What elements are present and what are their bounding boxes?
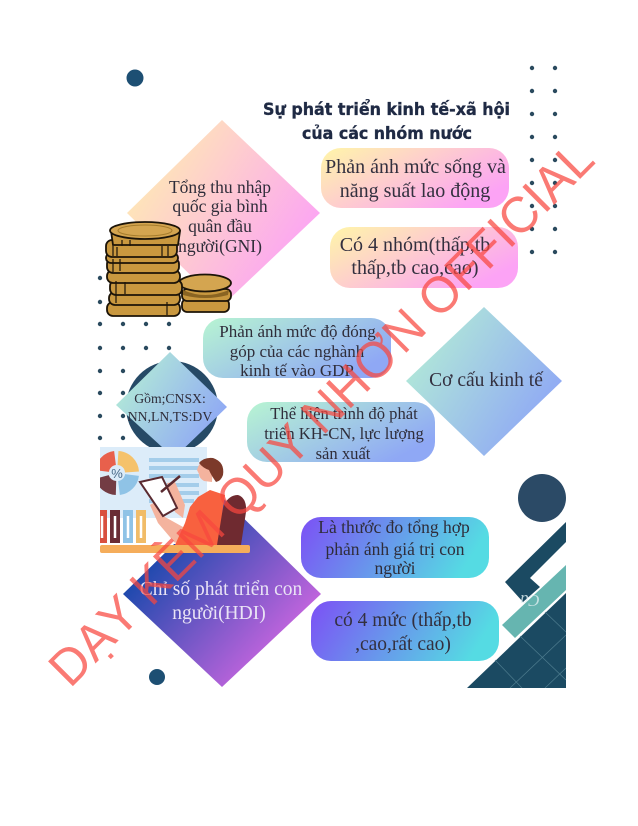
pill: four groups: Có 4 nhóm(thấp,tb	[340, 234, 490, 256]
pill: four groups: thấp,tb cao,cao)	[351, 257, 479, 279]
pill: four groups	[330, 227, 518, 288]
desk	[100, 545, 250, 553]
GNI label: Tổng thu nhập	[169, 177, 271, 197]
GNI label	[169, 177, 271, 256]
pill: GDP contribution: Phản ánh mức độ đóng	[219, 322, 376, 341]
chair	[214, 495, 246, 545]
pill: four levels: có 4 mức (thấp,tb	[334, 610, 472, 631]
pill: GDP contribution: góp của các nghành	[230, 342, 365, 361]
pill: HDI definition	[301, 517, 489, 578]
watermark: DẠY KÈM QUY NHƠN OFFICIAL	[37, 130, 605, 697]
title	[263, 100, 510, 143]
text lines on board	[149, 458, 199, 503]
panel: economic structure diamond: Cơ cấu kinh tế	[429, 370, 544, 391]
icon: coin stacks	[106, 222, 231, 316]
GNI label: người(GNI)	[178, 236, 262, 256]
pill: four levels: ,cao,rất cao)	[355, 634, 451, 655]
panel: composition diamond	[116, 352, 227, 458]
title: Sự phát triển kinh tế-xã hội	[263, 100, 510, 119]
coin ridges	[113, 240, 168, 315]
pill: living standard	[321, 148, 509, 208]
percent sign: %	[111, 466, 123, 481]
forearm	[167, 482, 185, 518]
panel: HDI diamond: Chỉ số phát triển con	[140, 579, 302, 600]
donut chart	[102, 458, 132, 488]
dot pattern: top right	[530, 66, 557, 254]
title: của các nhóm nước	[302, 124, 472, 143]
lower arm	[150, 502, 185, 543]
GNI label: quân đầu	[188, 216, 252, 236]
panel: HDI diamond: người(HDI)	[172, 603, 266, 624]
binders	[100, 510, 146, 543]
panel: composition diamond: NN,LN,TS:DV	[128, 409, 212, 424]
head	[197, 464, 212, 482]
decorative circle: top left	[126, 70, 144, 86]
panel: GNI diamond	[127, 120, 320, 306]
decoration: bottom left circle	[149, 669, 165, 685]
pill: science and technology: Thể hiện trình độ phát	[270, 404, 418, 423]
panel: composition diamond: Gồm;CNSX:	[134, 391, 206, 406]
panel: HDI diamond	[123, 497, 321, 687]
hair	[199, 458, 223, 482]
illustration: analyst at desk	[100, 447, 250, 553]
right coin stack	[179, 274, 231, 312]
pill: four levels	[311, 601, 499, 661]
pill: living standard: Phản ánh mức sống và	[325, 156, 506, 178]
pill: HDI definition: người	[374, 558, 416, 578]
pill: science and technology: triển KH-CN, lực lượng	[264, 424, 424, 443]
grid lines on corner	[495, 612, 566, 688]
decoration: geometric corner	[467, 474, 566, 688]
pill: HDI definition: Là thước đo tổng hợp	[318, 517, 470, 537]
pill: living standard: năng suất lao động	[340, 180, 490, 202]
GNI label: quốc gia bình	[172, 196, 268, 216]
left coin stack	[106, 222, 182, 316]
pill: GDP contribution	[203, 318, 391, 380]
panel: economic structure diamond	[406, 307, 562, 456]
pen	[161, 476, 180, 492]
pill: science and technology: sản xuất	[316, 444, 371, 463]
faint logo script: Ca	[520, 591, 540, 610]
dot pattern: left	[98, 276, 171, 440]
pill: science and technology	[247, 402, 435, 463]
clipboard	[140, 477, 177, 516]
pill: HDI definition: phản ánh giá trị con	[326, 539, 465, 559]
body	[175, 490, 225, 545]
chart board	[100, 447, 207, 518]
pill: GDP contribution: kinh tế vào GDP	[240, 361, 354, 380]
decorative circle behind small diamond	[126, 361, 218, 453]
